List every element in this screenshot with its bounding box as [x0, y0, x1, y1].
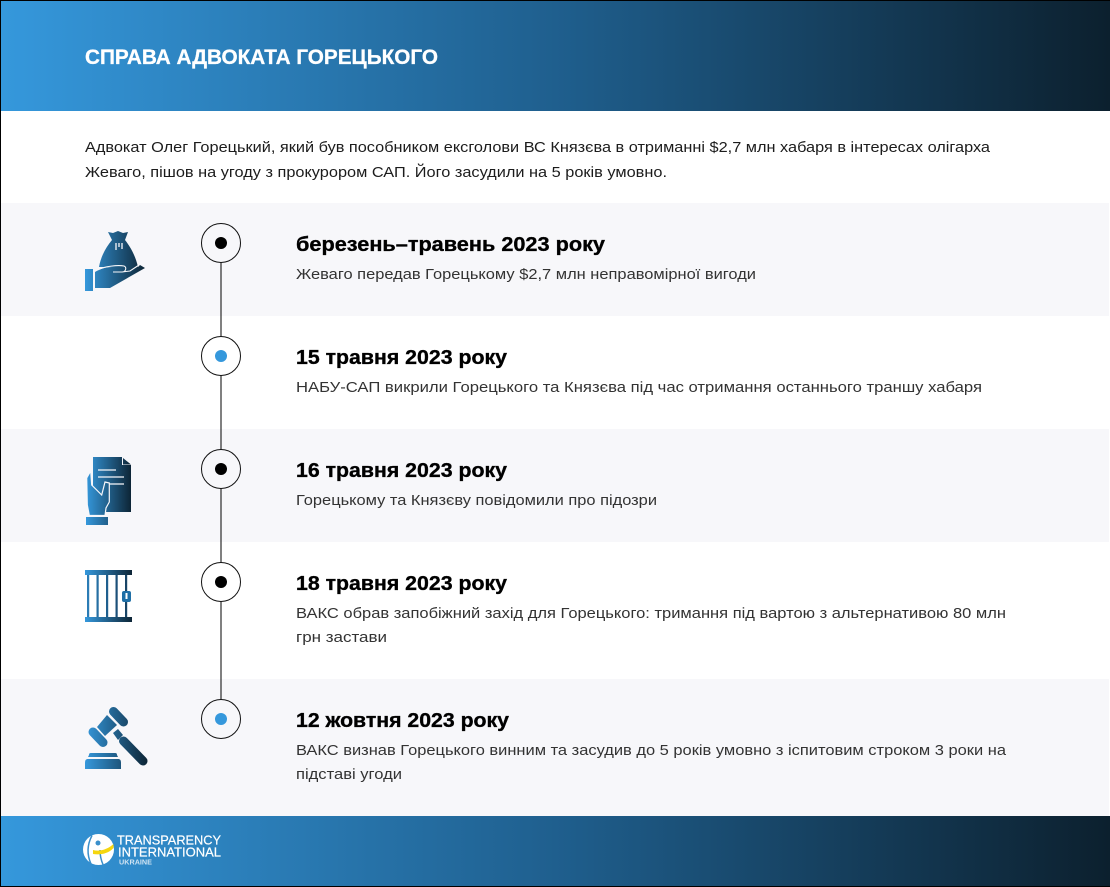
intro text: Жеваго, пішов на угоду з прокурором САП. Його засудили на 5 років умовно.	[85, 163, 667, 181]
event 4: 18 травня 2023 року	[296, 572, 508, 595]
event 2	[296, 346, 982, 396]
logo: Transparency International Ukraine: UKRAINE	[119, 858, 152, 866]
timeline marker 5	[202, 700, 240, 738]
event 1: березень–травень 2023 року	[296, 233, 606, 256]
timeline marker 1	[202, 224, 240, 262]
intro text	[85, 139, 991, 181]
timeline marker 3	[202, 450, 240, 488]
header band	[1, 1, 1110, 111]
event 1: Жеваго передав Горецькому $2,7 млн неправомірної вигоди	[296, 266, 756, 283]
timeline marker 2	[202, 336, 240, 376]
event 5	[296, 709, 1007, 783]
event 4: ВАКС обрав запобіжний захід для Горецького: тримання під вартою з альтернативою 80 млн	[296, 605, 1006, 622]
event 5: підставі угоди	[296, 766, 402, 783]
event 2: НАБУ-САП викрили Горецького та Князєва під час отримання останнього траншу хабаря	[296, 379, 982, 396]
row backgrounds	[1, 203, 1109, 816]
event 5: ВАКС визнав Горецького винним та засудив до 5 років умовно з іспитовим строком 3 роки на	[296, 742, 1007, 759]
event 3	[296, 459, 657, 509]
intro text: Адвокат Олег Горецький, який був пособником ексголови ВС Князєва в отриманні $2,7 млн хабаря в інтересах олігарха	[85, 139, 991, 156]
icon: hand holding document	[86, 457, 131, 525]
footer band	[1, 816, 1110, 886]
event 4	[296, 572, 1006, 646]
timeline marker 4	[202, 562, 240, 602]
event 5: 12 жовтня 2023 року	[296, 709, 510, 732]
event 4: грн застави	[296, 629, 387, 646]
event 3: 16 травня 2023 року	[296, 459, 508, 482]
logo: Transparency International Ukraine: TRANSPARENCY	[117, 832, 221, 848]
logo: Transparency International Ukraine: INTERNATIONAL	[118, 844, 221, 860]
title: СПРАВА АДВОКАТА ГОРЕЦЬКОГО	[85, 46, 438, 69]
icon: judge gavel	[85, 712, 143, 769]
icon: prison bars	[85, 570, 132, 622]
icon: money bag on hand	[85, 231, 145, 291]
timeline axis	[220, 243, 222, 719]
event 2: 15 травня 2023 року	[296, 346, 508, 369]
event 3: Горецькому та Князєву повідомили про підозри	[296, 492, 657, 509]
logo: Transparency International Ukraine	[83, 832, 221, 866]
event 1	[296, 233, 756, 283]
